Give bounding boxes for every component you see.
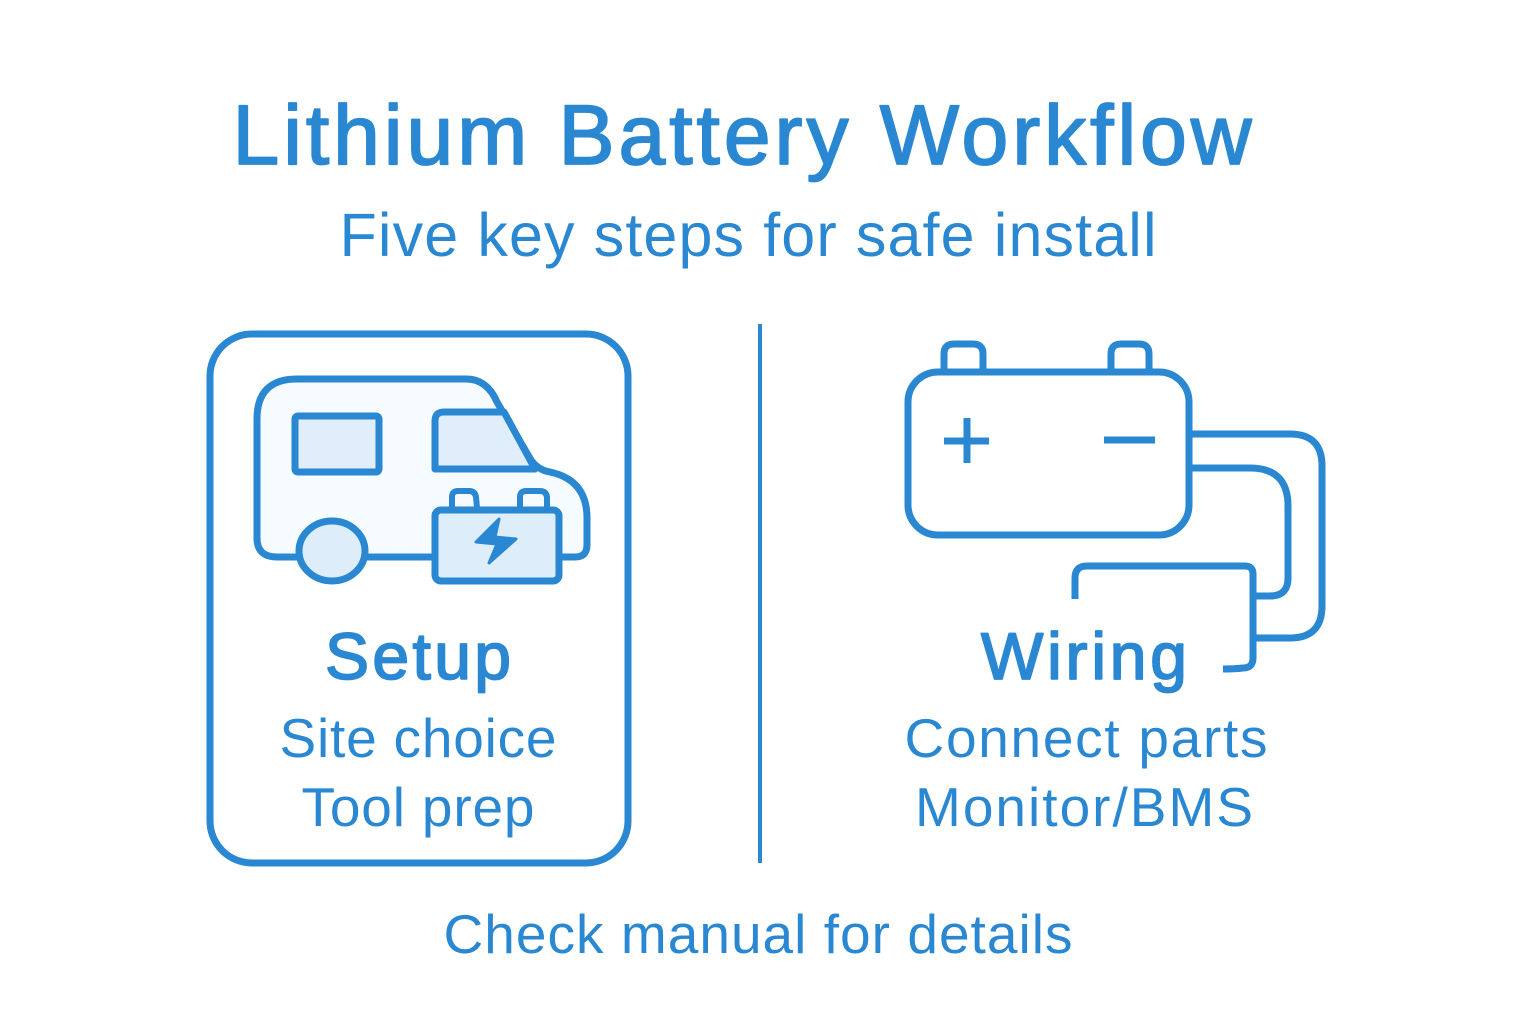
text: setup item 1: Site choice (280, 707, 556, 769)
text: setup item 2: Tool prep (302, 776, 534, 838)
heading: setup: Setup (325, 619, 511, 693)
title: Lithium Battery Workflow (232, 88, 1252, 182)
footer note: Check manual for details (444, 903, 1072, 965)
heading: wiring: Wiring (981, 619, 1187, 693)
icon: battery with wires (908, 344, 1322, 669)
icon: camper van with battery (257, 379, 587, 581)
text: wiring item 1: Connect parts (904, 707, 1268, 769)
text: wiring item 2: Monitor/BMS (915, 776, 1253, 838)
divider (758, 324, 762, 863)
panel: wiring (904, 344, 1322, 838)
panel: setup (210, 334, 628, 863)
subtitle: Five key steps for safe install (340, 201, 1156, 269)
